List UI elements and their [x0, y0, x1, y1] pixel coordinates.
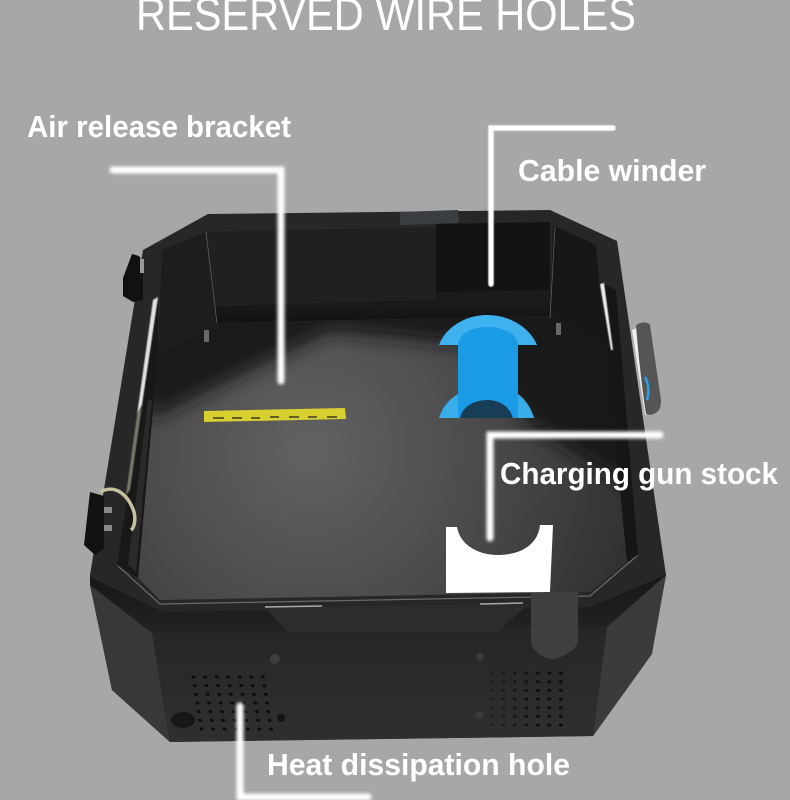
label: cable winder: Cable winder: [518, 153, 706, 188]
right bright edge highlight: [600, 283, 613, 350]
heat holes: left: [187, 673, 276, 733]
floor shadow from back wall: [152, 316, 620, 491]
charging post: [531, 592, 578, 659]
cable winder: [439, 315, 537, 418]
wall seam lines: [206, 227, 555, 323]
inner right slit: [600, 282, 638, 562]
pointer line: air release bracket: [113, 170, 281, 381]
left corner wall: [158, 232, 217, 353]
back wall lighter panel: [206, 227, 436, 306]
label: heat dissipation hole: Heat dissipation hole: [267, 747, 570, 782]
pointer line: charging gun stock: [490, 435, 660, 538]
floor: [138, 316, 627, 600]
front face: [152, 627, 607, 742]
front slot: [265, 604, 530, 632]
heat holes: right: [490, 672, 563, 726]
pointer line: cable winder: [491, 128, 613, 284]
inner rim lines: [117, 555, 638, 604]
front ledge: [90, 575, 666, 633]
right reader device: [632, 322, 661, 415]
mounting screws: [204, 323, 561, 342]
right corner wall: [550, 225, 606, 345]
label: charging gun stock: Charging gun stock: [500, 456, 779, 491]
left bright edge highlight: [137, 297, 158, 415]
lid tab: [400, 210, 459, 225]
box: charging cabinet interior view: [84, 210, 666, 742]
side face: left: [90, 585, 170, 742]
inner left slit: [117, 298, 158, 578]
pointer line: heat dissipation hole: [240, 706, 368, 797]
silhouette: [90, 210, 666, 742]
side face: right: [593, 575, 666, 736]
reserved wire hole: [171, 712, 195, 728]
back wall: [206, 225, 550, 323]
measuring strip: yellow bracket: [204, 408, 346, 422]
screw points on front face: [270, 654, 280, 664]
left latch lower with ring: [84, 489, 135, 555]
left latch upper: [123, 254, 144, 302]
label: air release bracket: Air release bracket: [27, 109, 291, 144]
charging gun stock: [446, 525, 553, 593]
